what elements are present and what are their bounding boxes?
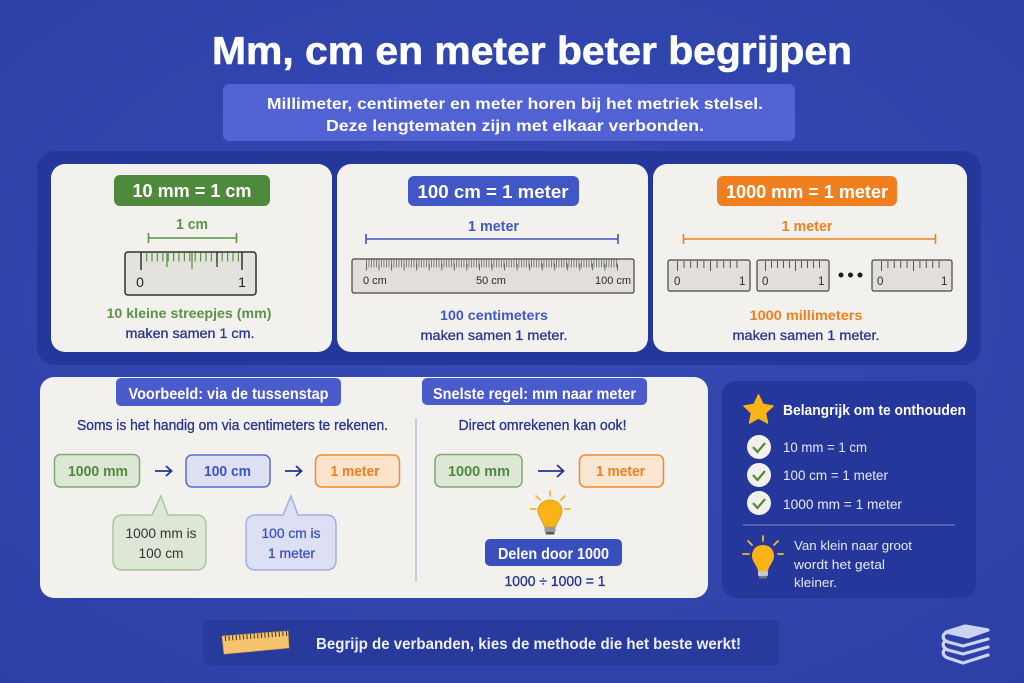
icon: books [943,626,988,663]
step: 100 cm [186,455,270,487]
ruler two [757,260,829,291]
badge: delen door 1000: Delen door 1000 [498,546,609,563]
measure label: 1 meter: 1 meter [468,219,519,235]
subtitle box [223,84,795,141]
item: 1000 mm = 1 meter: 1000 mm = 1 meter [783,497,902,512]
item: 100 cm = 1 meter [747,463,888,487]
icon: star [744,395,773,423]
formula: 1000 ÷ 1000 = 1 [504,574,606,590]
caption [106,305,272,341]
badge: 1000 mm = 1 meter [717,176,897,206]
icon: light bulb [530,491,570,534]
arrow [155,466,172,476]
caption: 100 centimeters [440,307,548,323]
heading: via de tussenstap: Voorbeeld: via de tussenstap [128,386,328,403]
ruler three: 1 [941,276,947,288]
caption: maken samen 1 meter. [732,327,880,343]
subtitle box: Deze lengtematen zijn met elkaar verbonden. [326,118,704,135]
caption [732,307,880,343]
item: 1000 mm = 1 meter [747,491,902,515]
title: Mm, cm en meter beter begrijpen [212,30,852,73]
badge: delen door 1000 [485,539,622,566]
step: 1000 mm: 1000 mm [448,464,510,480]
ruler: 0 to 100 cm: 100 cm [595,275,631,287]
card: 100 cm = 1 meter [337,164,648,352]
heading: snelste regel [422,378,647,405]
measure line: 1 cm [148,233,236,243]
step: 1 meter: 1 meter [596,464,645,480]
ruler: 0 to 1 [125,252,256,295]
footer bar [203,620,779,665]
caption: 1000 millimeters [750,307,863,323]
panel heading: Belangrijk om te onthouden [783,403,966,419]
item: 100 cm = 1 meter: 100 cm = 1 meter [783,468,888,483]
step: 100 cm: 100 cm [204,464,251,480]
ruler two: 1 [818,276,824,288]
icon: light bulb [743,536,783,578]
ruler: 0 to 100 cm: 0 cm [363,275,387,287]
step: 1 meter [580,455,664,487]
callout: 1000 mm is 100 cm [113,496,206,570]
panel: examples [40,377,708,598]
caption: maken samen 1 cm. [126,325,254,341]
checklist [747,435,902,515]
item: 10 mm = 1 cm: 10 mm = 1 cm [783,440,867,455]
step: 1000 mm: 1000 mm [68,464,128,480]
icon: ruler [222,631,289,654]
step: 1 meter [316,455,400,487]
step: 1 meter: 1 meter [330,464,380,480]
subtitle box: Millimeter, centimeter en meter horen bij het metriek stelsel. [267,96,763,113]
ellipsis dots [838,272,862,278]
badge: 100 cm = 1 meter [408,176,579,206]
caption [420,307,568,343]
badge: 1000 mm = 1 meter: 1000 mm = 1 meter [726,182,888,202]
callout: 1000 mm is 100 cm: 100 cm [138,545,184,561]
caption: maken samen 1 meter. [420,327,568,343]
footer text: Begrijp de verbanden, kies de methode die het beste werkt! [316,636,741,653]
badge: 100 cm = 1 meter: 100 cm = 1 meter [418,182,568,202]
note text: wordt het getal [793,557,885,572]
badge: 10 mm = 1 cm [114,175,270,206]
heading: via de tussenstap [116,378,341,406]
callout: 100 cm is 1 meter [246,496,336,570]
heading: snelste regel: Snelste regel: mm naar meter [433,386,636,403]
badge: 10 mm = 1 cm: 10 mm = 1 cm [132,181,252,201]
measure line: 1 meter [684,234,936,244]
note text [793,538,912,590]
card: 10 mm = 1 cm [51,164,332,352]
ruler one: 1 [739,276,745,288]
arrow [538,465,564,477]
ruler one: 0 [674,276,680,288]
note text: Van klein naar groot [794,538,912,553]
step: 1000 mm [54,454,140,487]
intro text: Direct omrekenen kan ook! [458,418,626,434]
panel: conversion cards [37,151,981,365]
measure label: 1 meter: 1 meter [782,219,833,235]
item: 10 mm = 1 cm [747,435,867,459]
ruler: 0 to 100 cm [352,259,634,293]
ruler two: 0 [762,276,768,288]
panel: belangrijk om te onthouden [722,381,976,598]
measure label: 1 cm: 1 cm [176,217,208,233]
ruler: 0 to 1: 1 [238,274,246,290]
callout: 1000 mm is 100 cm: 1000 mm is [126,525,196,541]
ruler three: 0 [877,276,883,288]
ruler three [872,260,952,291]
measure line: 1 meter [366,234,618,244]
step: 1000 mm [435,454,522,487]
callout: 100 cm is 1 meter: 1 meter [268,545,315,561]
ruler: 0 to 1: 0 [136,274,144,290]
note text: kleiner. [794,575,837,590]
ruler: 0 to 100 cm: 50 cm [476,275,506,287]
card: 1000 mm = 1 meter [653,164,967,352]
intro text: Soms is het handig om via centimeters te rekenen. [77,418,388,434]
rulers row [668,260,952,291]
caption: 10 kleine streepjes (mm) [106,305,272,321]
ruler one [668,260,750,291]
arrow [285,466,302,476]
callout: 100 cm is 1 meter: 100 cm is [262,525,320,541]
